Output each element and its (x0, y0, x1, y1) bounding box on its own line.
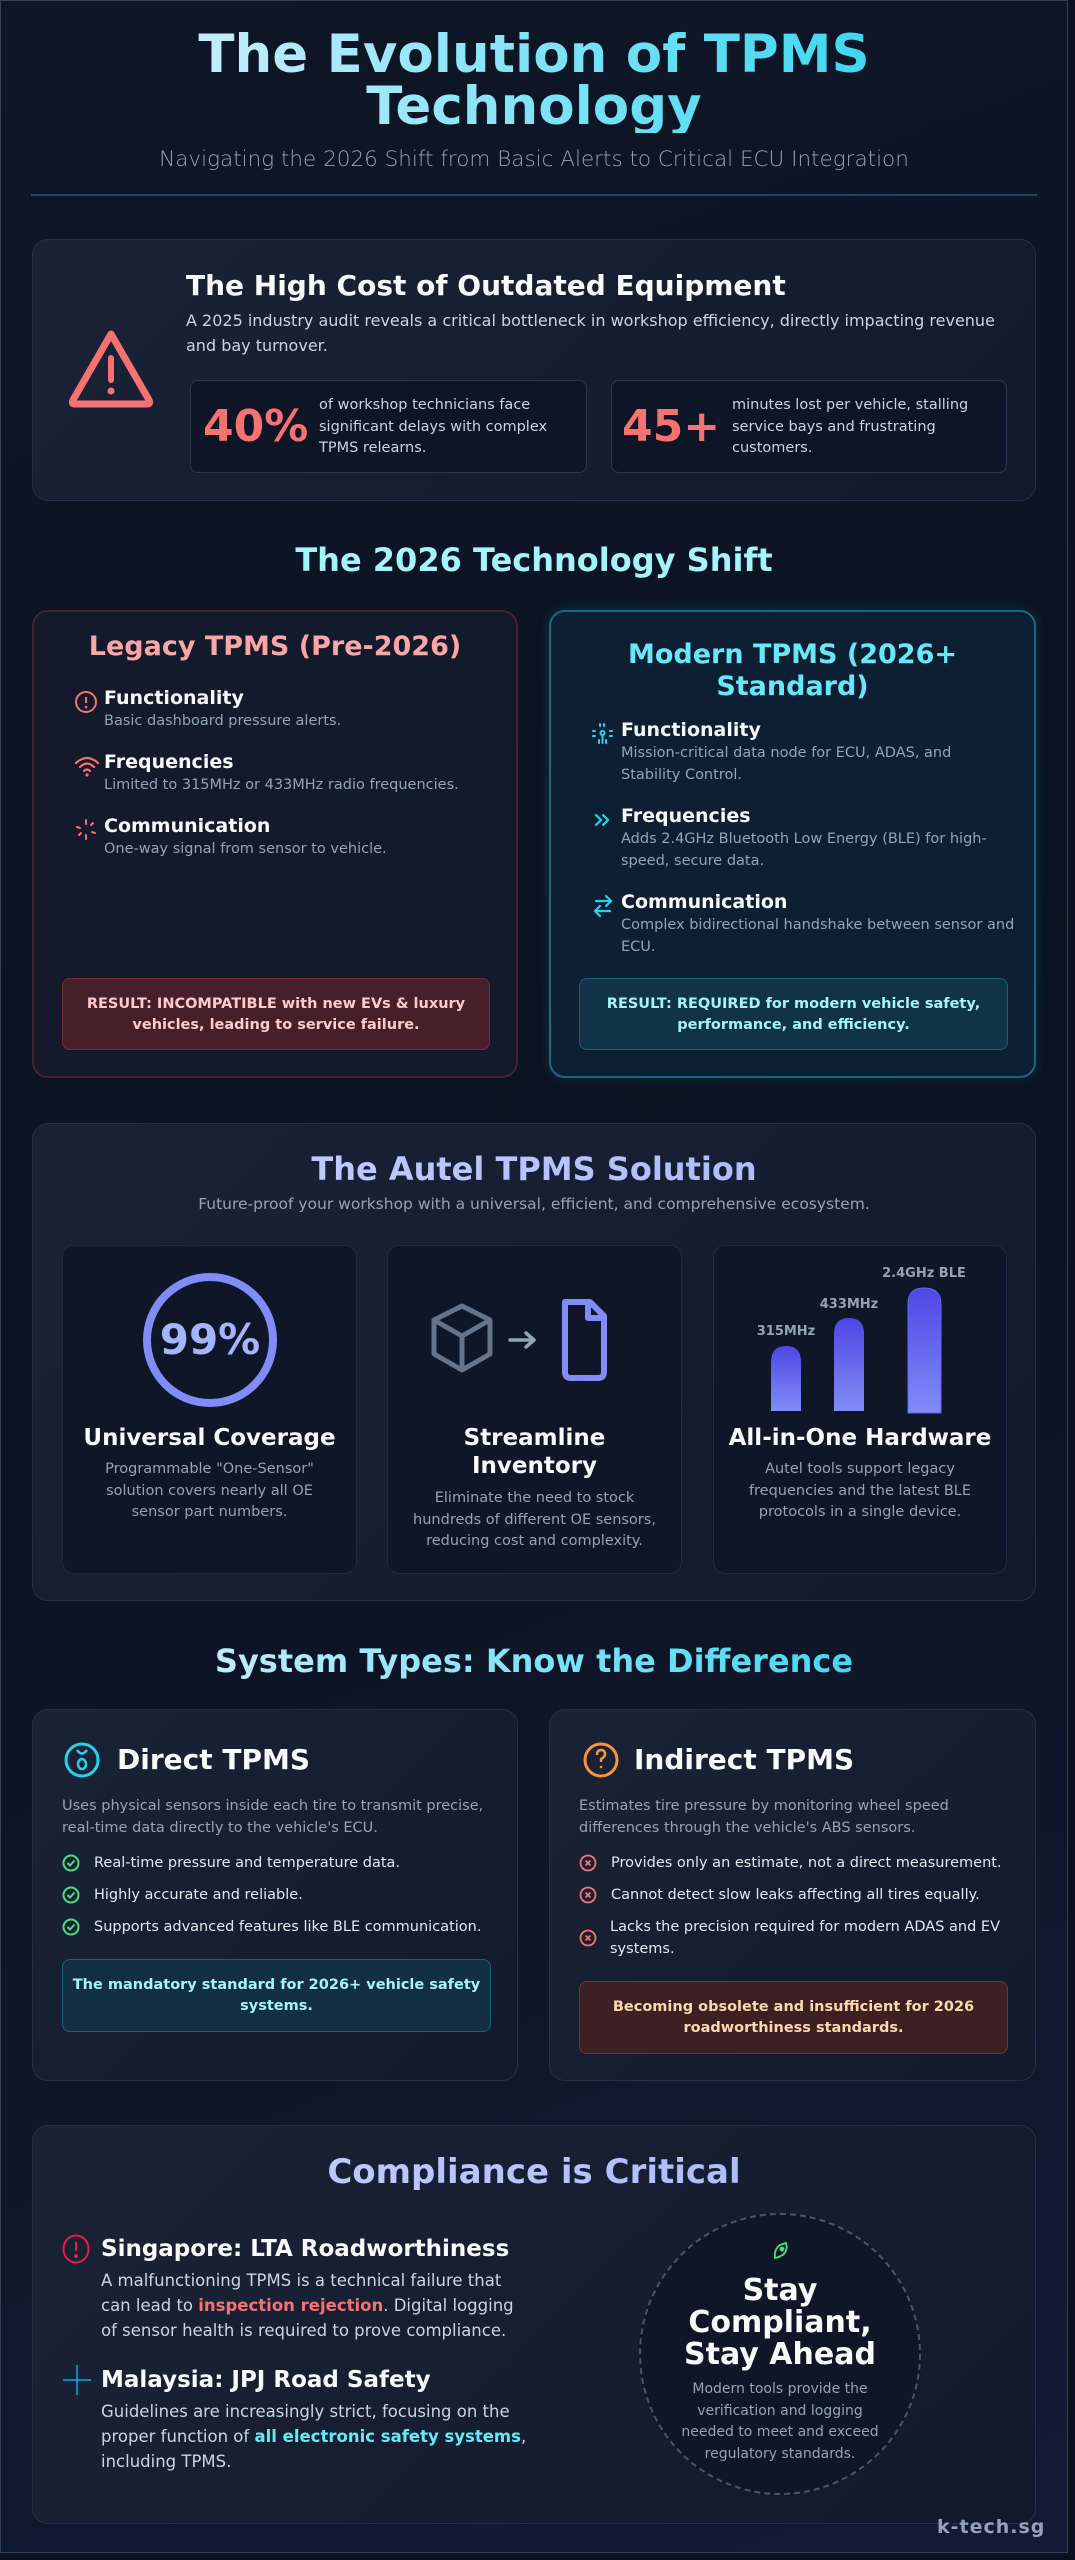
list: direct benefits: Highly accurate and reliable. (94, 1887, 303, 1903)
item: functionality (75, 687, 341, 729)
modern title: Modern TPMS (2026+ Standard) (628, 639, 957, 702)
item: functionality: Functionality (104, 687, 244, 709)
result: legacy (62, 978, 490, 1050)
callout: obsolete (579, 1981, 1008, 2054)
section heading: 2026 shift: The 2026 Technology Shift (295, 541, 773, 579)
stat: 45+ (611, 380, 1007, 473)
autel title: The Autel TPMS Solution (311, 1150, 757, 1188)
card: universal coverage: Programmable "One-Sensor" solution covers nearly all OE sensor part numbers. (105, 1461, 314, 1520)
icon: 99% circle: 99% (160, 1315, 260, 1364)
item: frequencies: Adds 2.4GHz Bluetooth Low Energy (BLE) for high-speed, secure data. (621, 831, 987, 869)
item: functionality: Mission-critical data node for ECU, ADAS, and Stability Control. (621, 745, 951, 783)
panel: indirect TPMS (549, 1709, 1036, 2081)
block: singapore (62, 2234, 514, 2340)
panel: autel solution (32, 1123, 1036, 1601)
compliance title: Compliance is Critical (327, 2152, 741, 2192)
list: indirect drawbacks (580, 1854, 1002, 1957)
title (61, 29, 1007, 133)
footer brand: k-tech.sg (937, 2516, 1045, 2538)
description: A 2025 industry audit reveals a critical bottleneck in workshop efficiency, directly impacting revenue and bay turnover. (186, 311, 995, 355)
item: communication: One-way signal from sensor to vehicle. (104, 841, 387, 857)
panel: indirect TPMS: Indirect TPMS (634, 1743, 854, 1776)
panel: direct TPMS (32, 1709, 518, 2081)
block: malaysia (63, 2365, 526, 2471)
chart: frequency bars: 315MHz (757, 1324, 815, 1339)
chart: frequency bars: 433MHz (820, 1297, 878, 1312)
compliance title (33, 2150, 1035, 2194)
list: indirect drawbacks: Cannot detect slow leaks affecting all tires equally. (611, 1887, 980, 1903)
callout: stay compliant circle: Stay Ahead (684, 2337, 876, 2372)
stat: 45+: 45+ (622, 401, 720, 452)
icon: direct sensor (64, 1742, 100, 1778)
item: communication: Complex bidirectional handshake between sensor and ECU. (621, 917, 1014, 955)
panel: indirect TPMS: Estimates tire pressure by monitoring wheel speed differences through the vehicle's ABS sensors. (579, 1798, 949, 1836)
panel: legacy (32, 610, 518, 1078)
card: all-in-one hardware (713, 1245, 1007, 1574)
card: streamline inventory: Inventory (472, 1453, 597, 1479)
panel: modern (549, 610, 1036, 1078)
heading: The High Cost of Outdated Equipment (186, 269, 786, 302)
result: modern: RESULT: REQUIRED for modern vehicle safety, performance, and efficiency. (607, 996, 980, 1033)
callout: obsolete: Becoming obsolete and insufficient for 2026 roadworthiness standards. (613, 1999, 974, 2036)
autel subtitle: Future-proof your workshop with a universal, efficient, and comprehensive ecosystem. (198, 1195, 870, 1213)
chart: frequency bars (757, 1288, 942, 1414)
result: legacy: RESULT: INCOMPATIBLE with new EVs & luxury vehicles, leading to service failure. (87, 996, 465, 1033)
panel: direct TPMS: Direct TPMS (117, 1743, 310, 1776)
stat: 45+: minutes lost per vehicle, stalling service bays and frustrating customers. (732, 397, 968, 456)
legacy title: Legacy TPMS (Pre-2026) (89, 631, 461, 662)
card: streamline inventory (387, 1245, 682, 1574)
subtitle: Navigating the 2026 Shift from Basic Alerts to Critical ECU Integration (159, 147, 909, 172)
panel: high cost (32, 239, 1036, 501)
callout: stay compliant circle: Compliant, (688, 2305, 872, 2340)
callout: mandatory (62, 1959, 491, 2032)
list: indirect drawbacks: Provides only an estimate, not a direct measurement. (611, 1855, 1002, 1871)
title: The Evolution of TPMS (198, 24, 870, 85)
autel title (33, 1149, 1035, 1189)
icon: leaf (774, 2242, 788, 2260)
result: modern (579, 978, 1008, 1050)
item: frequencies: Limited to 315MHz or 433MHz radio frequencies. (104, 777, 459, 793)
title: Technology (366, 76, 702, 137)
card: all-in-one hardware: All-in-One Hardware (729, 1425, 991, 1451)
item: frequencies (594, 805, 987, 869)
card: streamline inventory: Eliminate the need to stock hundreds of different OE sensors, reducing cost and complexity. (413, 1490, 656, 1549)
card: all-in-one hardware: Autel tools support legacy frequencies and the latest BLE protocols in a single device. (749, 1461, 971, 1520)
item: communication (76, 815, 387, 857)
icon: 99% circle (143, 1273, 277, 1407)
section heading: system types: System Types: Know the Difference (215, 1642, 853, 1680)
panel: compliance (32, 2125, 1036, 2524)
card: universal coverage: Universal Coverage (83, 1425, 336, 1451)
panel: direct TPMS: Uses physical sensors inside each tire to transmit precise, real-time data directly to the vehicle's ECU. (62, 1798, 483, 1836)
section heading: system types (32, 1641, 1036, 1681)
item: communication: Communication (104, 815, 270, 837)
block: malaysia: Guidelines are increasingly strict, focusing on the proper function of all electronic safety systems, including TPMS. (101, 2402, 526, 2471)
item: communication (594, 891, 1014, 955)
list: direct benefits: Real-time pressure and temperature data. (94, 1855, 400, 1871)
callout: stay compliant circle (639, 2213, 921, 2495)
icon: indirect (584, 1742, 618, 1778)
block: singapore: A malfunctioning TPMS is a technical failure that can lead to inspection rejection. Digital logging of sensor health is required to prove compliance. (101, 2271, 514, 2340)
item: frequencies: Frequencies (621, 805, 751, 827)
icon: warning triangle (68, 330, 154, 408)
block: singapore: Singapore: LTA Roadworthiness (101, 2236, 509, 2262)
card: all-in-one hardware: 2.4GHz BLE (882, 1266, 966, 1281)
item: communication: Communication (621, 891, 787, 913)
item: frequencies (74, 751, 459, 793)
list: direct benefits: Supports advanced features like BLE communication. (94, 1919, 481, 1935)
callout: stay compliant circle: Stay (743, 2273, 817, 2308)
list: indirect drawbacks: Lacks the precision required for modern ADAS and EV systems. (610, 1919, 1000, 1957)
callout: mandatory: The mandatory standard for 2026+ vehicle safety systems. (73, 1977, 480, 2014)
stat: 40% (190, 380, 587, 473)
item: functionality (592, 719, 951, 783)
block: malaysia: Malaysia: JPJ Road Safety (101, 2367, 431, 2393)
card: streamline inventory: Streamline (464, 1425, 605, 1451)
stat: 40%: 40% (203, 401, 308, 452)
card: universal coverage (62, 1245, 357, 1574)
stat: 40%: of workshop technicians face significant delays with complex TPMS relearns. (319, 397, 547, 456)
item: frequencies: Frequencies (104, 751, 234, 773)
item: functionality: Functionality (621, 719, 761, 741)
icon: box to file (432, 1299, 607, 1381)
item: functionality: Basic dashboard pressure alerts. (104, 713, 341, 729)
callout: stay compliant circle: Modern tools provide the verification and logging needed to meet and exceed regulatory standards. (681, 2381, 879, 2462)
list: direct benefits (62, 1854, 481, 1936)
